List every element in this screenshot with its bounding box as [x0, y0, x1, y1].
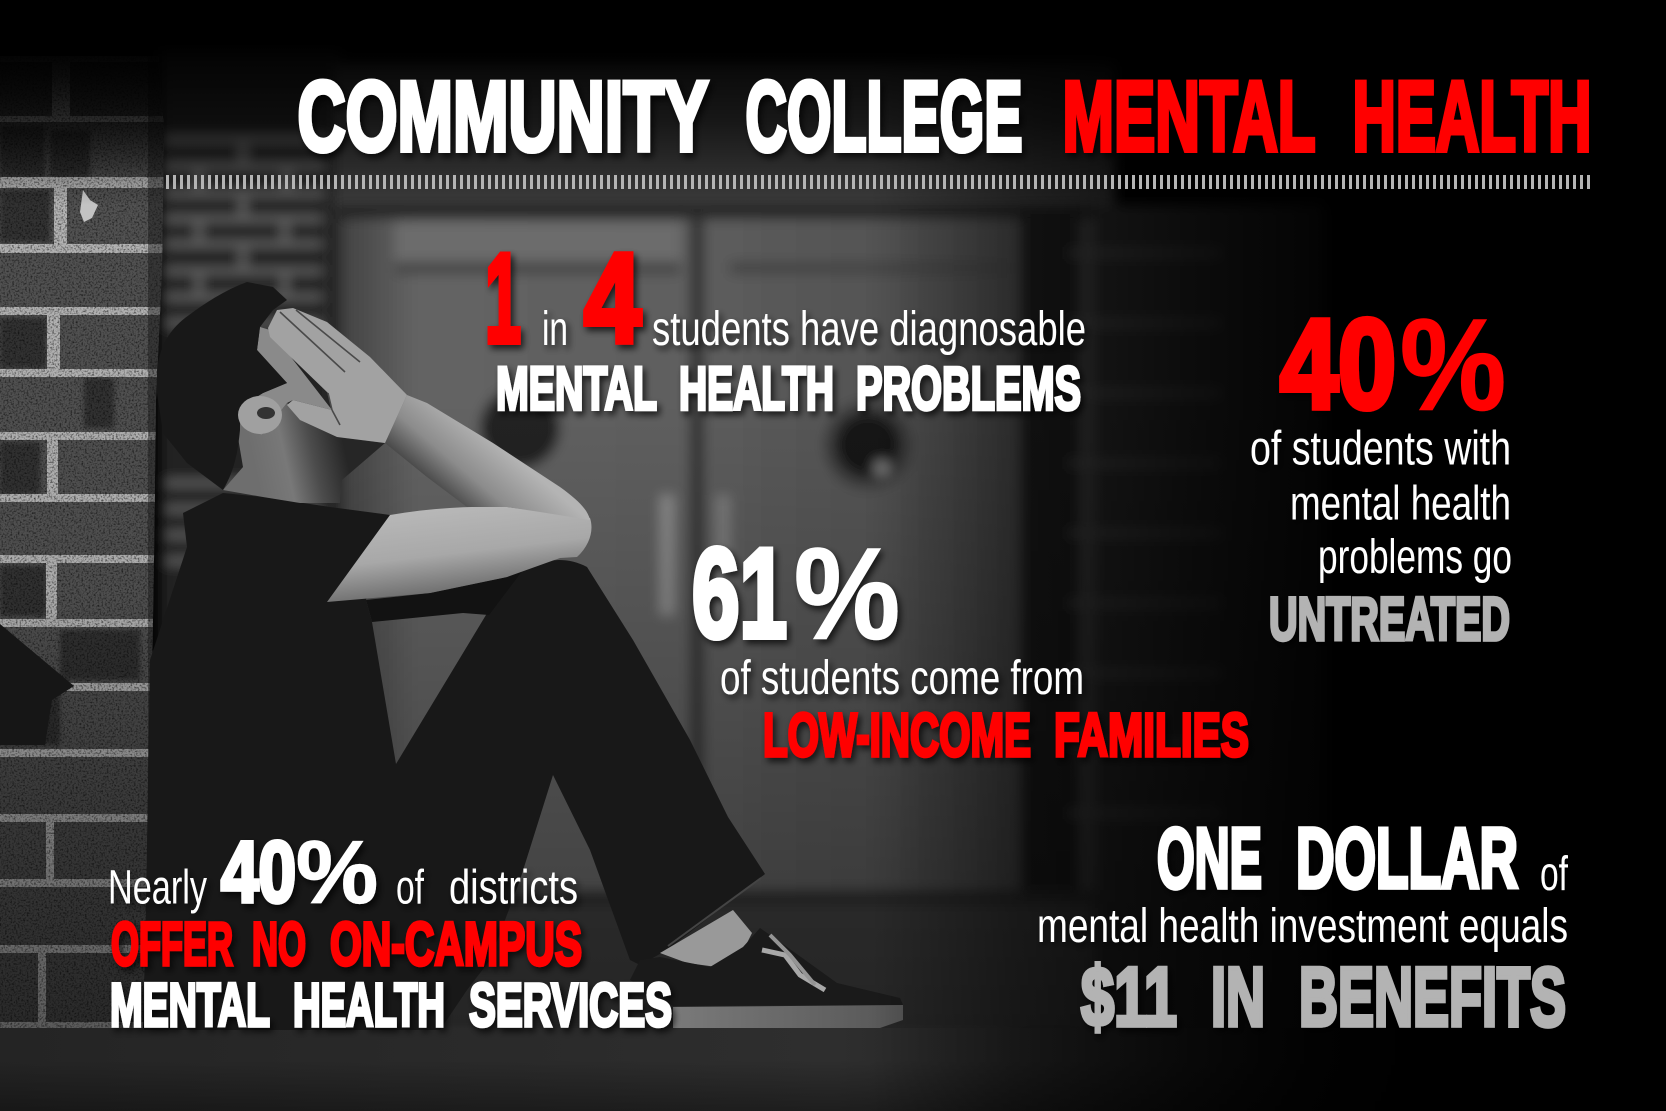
title [298, 60, 1592, 172]
sock [660, 910, 752, 967]
stat: 40% untreated: of students with [1250, 422, 1511, 476]
blurred back wall and doors [160, 50, 1325, 1040]
railing shadow [0, 624, 74, 745]
stat: nearly 40% of districts: ON-CAMPUS [330, 910, 582, 978]
stat: nearly 40% of districts: Nearly [108, 862, 207, 915]
stat: 61% low-income: FAMILIES [1054, 701, 1249, 769]
stat: nearly 40% of districts: SERVICES [469, 971, 672, 1039]
darkening overlays [322, 400, 1322, 1040]
stat: 1 in 4 students: 4 [584, 227, 641, 369]
stat: one dollar, $11 in benefits [1037, 812, 1568, 1044]
stat: nearly 40% of districts: HEALTH [293, 971, 445, 1039]
hand [268, 308, 407, 443]
ear [238, 396, 282, 434]
title: COLLEGE [746, 60, 1022, 172]
stat: 40% untreated: 40 [1280, 293, 1396, 435]
forearm [385, 395, 590, 520]
stat: 1 in 4 students: 1 [485, 227, 521, 369]
stat: 1 in 4 students [485, 227, 1086, 422]
shoe [630, 928, 903, 1028]
side of head [240, 327, 332, 435]
floor [0, 1028, 1666, 1111]
stat: 40% untreated [1250, 292, 1512, 653]
stat: 1 in 4 students: in [542, 303, 568, 356]
stat: 40% untreated: mental health [1290, 478, 1511, 530]
under-arm shadow [366, 570, 523, 622]
stat: one dollar, $11 in benefits: of [1540, 848, 1568, 901]
stat: one dollar, $11 in benefits: DOLLAR [1296, 812, 1518, 907]
neck [223, 403, 385, 503]
hair [157, 282, 287, 490]
stat: nearly 40% of districts [108, 822, 672, 1039]
stat: nearly 40% of districts: districts [449, 862, 578, 915]
stat: 1 in 4 students: HEALTH [679, 354, 834, 422]
stat: one dollar, $11 in benefits: IN [1211, 950, 1265, 1044]
stat: 61% low-income: 61 [692, 522, 787, 664]
torso and legs [144, 493, 765, 1030]
stat: one dollar, $11 in benefits: $11 [1081, 950, 1177, 1044]
pillar right side shade [148, 116, 164, 770]
stat: 61% low-income: % [794, 520, 900, 666]
stat: 40% untreated: problems go [1318, 531, 1512, 584]
stat: nearly 40% of districts: MENTAL [110, 971, 270, 1039]
stat: 40% untreated: UNTREATED [1269, 585, 1510, 653]
title: COMMUNITY [298, 60, 708, 172]
stat: nearly 40% of districts: % [296, 822, 378, 922]
seated man [144, 282, 903, 1030]
title: MENTAL [1062, 60, 1316, 172]
stat: 61% low-income: of students come from [720, 652, 1084, 705]
upper arm [327, 507, 591, 602]
stat: nearly 40% of districts: 40 [221, 825, 296, 921]
stat: 1 in 4 students: MENTAL [496, 354, 657, 422]
stat: nearly 40% of districts: NO [252, 910, 306, 978]
stat: 1 in 4 students: PROBLEMS [856, 354, 1081, 422]
stat: one dollar, $11 in benefits: ONE [1157, 812, 1262, 907]
stat: 61% low-income [692, 520, 1249, 769]
stat: nearly 40% of districts: OFFER [111, 910, 233, 978]
stat: 40% untreated: % [1400, 292, 1506, 438]
jeans cuff stitch [668, 878, 761, 946]
brick pillar [0, 50, 172, 1035]
divider [166, 175, 1594, 189]
stat: nearly 40% of districts: of [396, 862, 424, 915]
stat: 61% low-income: LOW-INCOME [763, 701, 1031, 769]
stat: 1 in 4 students: students have diagnosable [652, 303, 1086, 356]
